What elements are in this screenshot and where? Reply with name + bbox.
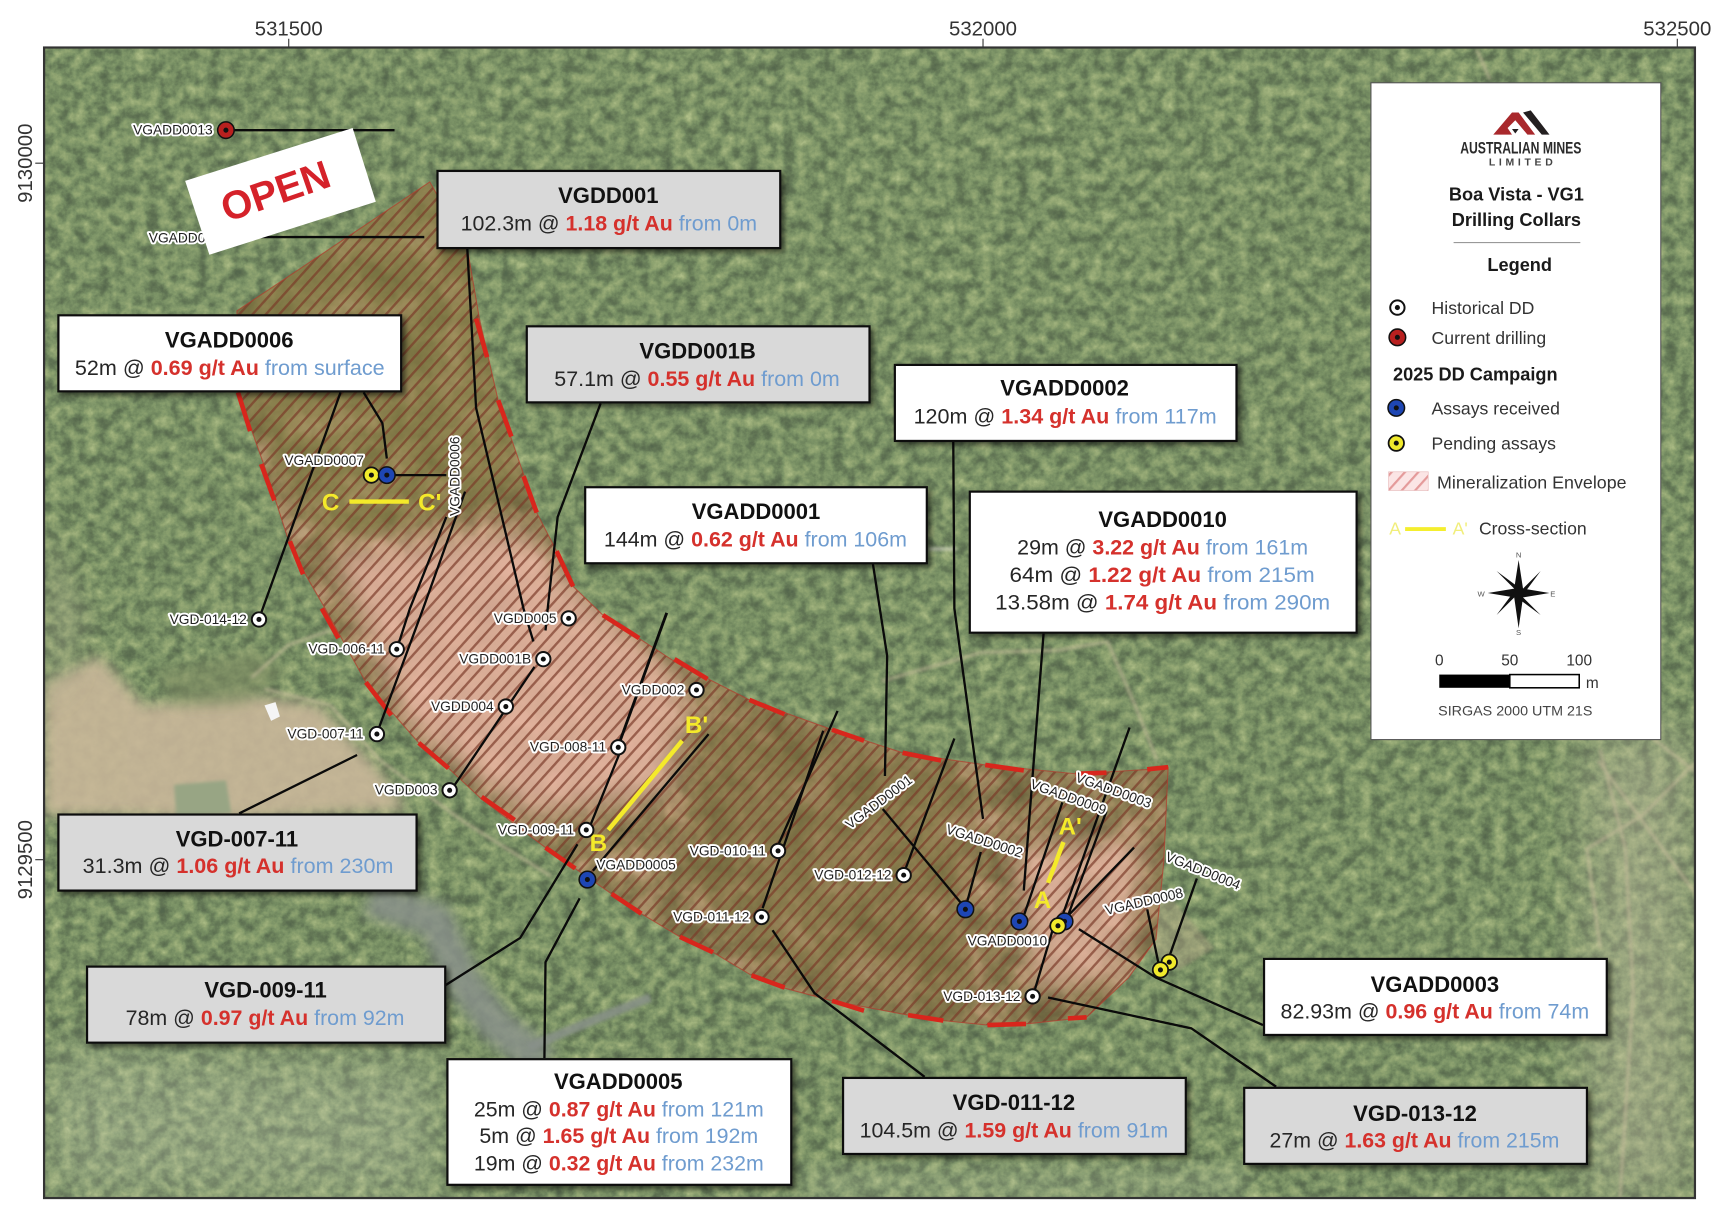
icon: compass rose: W — [1478, 589, 1486, 598]
collar labels: VGD-007-11 — [287, 726, 364, 741]
collar labels: VGADD0013 — [149, 231, 229, 246]
callout: VGADD0006 — [58, 315, 401, 391]
callout: VGDD001B — [527, 326, 870, 402]
scale bar: 50 — [1501, 653, 1518, 670]
callout: VGADD0010: 64m @ 1.22 g/t Au from 215m — [1009, 564, 1315, 587]
collar labels — [133, 123, 1243, 1004]
axis ticks and coordinates: 532000 — [949, 18, 1017, 40]
cross-section lines — [322, 489, 1082, 914]
mineralization envelope — [220, 165, 1190, 1047]
icon: compass rose: S — [1516, 628, 1521, 637]
legend title — [1449, 185, 1584, 275]
collar labels: VGADD0008 — [1104, 885, 1185, 918]
callout: VGD-007-11 — [58, 815, 417, 891]
callout: VGADD0006: 52m @ 0.69 g/t Au from surface — [75, 357, 385, 380]
scale bar: 100 — [1566, 653, 1592, 670]
collar labels: VGADD0006 — [448, 436, 463, 516]
scale bar: 0 — [1435, 653, 1444, 670]
legend item: assays received: Assays received — [1432, 398, 1560, 418]
collar labels: VGADD0007 — [284, 453, 364, 468]
callout: VGADD0002: 120m @ 1.34 g/t Au from 117m — [914, 405, 1217, 428]
callout: VGADD0002 — [895, 365, 1236, 441]
legend item: cross-section: A — [1389, 519, 1401, 539]
collar labels: VGD-008-11 — [530, 740, 606, 755]
collar labels: VGD-009-11 — [498, 822, 574, 837]
collar labels: VGD-014-12 — [170, 612, 247, 627]
collar labels: VGDD005 — [494, 611, 557, 626]
callout: VGD-013-12: VGD-013-12 — [1353, 1101, 1477, 1126]
collar labels: VGDD001B — [459, 652, 531, 667]
callout: VGDD001B: 57.1m @ 0.55 g/t Au from 0m — [554, 368, 840, 391]
panel: legend — [1371, 83, 1661, 740]
collar labels: VGADD0004 — [1163, 849, 1243, 893]
cross-section lines: C — [322, 489, 339, 516]
callout: VGADD0001 — [585, 487, 927, 563]
callout: VGD-011-12: 104.5m @ 1.59 g/t Au from 91m — [860, 1119, 1168, 1142]
collar labels: VGADD0003 — [1074, 770, 1154, 811]
callout: VGD-009-11: 78m @ 0.97 g/t Au from 92m — [126, 1007, 404, 1030]
logo — [1460, 110, 1581, 168]
callout: VGD-009-11 — [87, 967, 445, 1043]
callout: VGADD0002: VGADD0002 — [1000, 376, 1129, 401]
callout: VGD-013-12: 27m @ 1.63 g/t Au from 215m — [1270, 1129, 1559, 1152]
logo: AUSTRALIAN MINES — [1460, 138, 1581, 157]
scale bar — [1435, 653, 1599, 692]
callout: VGADD0003: VGADD0003 — [1371, 972, 1499, 997]
legend title: Boa Vista - VG1 — [1449, 185, 1584, 205]
axis ticks and coordinates — [15, 18, 1711, 899]
OPEN sticker — [185, 128, 376, 255]
collar labels: VGD-006-11 — [308, 642, 385, 657]
icon: compass rose — [1478, 551, 1555, 637]
collar labels: VGADD0009 — [1028, 776, 1108, 818]
cross-section lines: A' — [1058, 813, 1082, 840]
callout: VGADD0010: 13.58m @ 1.74 g/t Au from 290m — [995, 592, 1330, 615]
callout: VGADD0005: 25m @ 0.87 g/t Au from 121m — [474, 1098, 764, 1121]
scale bar: m — [1586, 675, 1599, 692]
collar labels: VGD-010-11 — [690, 843, 766, 858]
drill traces and leader lines — [231, 130, 1276, 1087]
axis ticks and coordinates: 9130000 — [15, 124, 37, 203]
callout: VGDD001: 102.3m @ 1.18 g/t Au from 0m — [461, 212, 757, 235]
collar labels: VGADD0013 — [133, 123, 213, 138]
callout: VGADD0003 — [1264, 959, 1607, 1035]
callout: VGADD0001: 144m @ 0.62 g/t Au from 106m — [604, 529, 907, 552]
cross-section lines: B — [590, 830, 607, 857]
legend heading: campaign: 2025 DD Campaign — [1393, 364, 1558, 384]
callout: VGADD0005: 19m @ 0.32 g/t Au from 232m — [474, 1152, 764, 1175]
callout: VGD-011-12 — [843, 1078, 1186, 1154]
icon: compass rose: E — [1550, 589, 1555, 598]
callout: VGADD0006: VGADD0006 — [165, 327, 294, 352]
legend item: cross-section: Cross-section — [1479, 519, 1587, 539]
collar labels: VGD-013-12 — [943, 989, 1020, 1004]
callout: VGD-007-11: 31.3m @ 1.06 g/t Au from 230m — [83, 855, 393, 878]
legend item: cross-section — [1389, 519, 1587, 539]
legend title: Drilling Collars — [1452, 210, 1581, 230]
coordinate system note: SIRGAS 2000 UTM 21S — [1438, 703, 1592, 718]
collar labels: VGDD002 — [622, 682, 684, 697]
axis ticks and coordinates: 531500 — [255, 18, 323, 40]
collar markers — [218, 122, 1177, 1004]
axis ticks and coordinates: 532500 — [1643, 18, 1711, 40]
collar labels: VGADD0010 — [968, 934, 1048, 949]
legend item: pending assays: Pending assays — [1432, 434, 1556, 454]
collar labels: VGADD0001 — [843, 772, 915, 832]
icon: compass rose: N — [1516, 551, 1521, 560]
cross-section lines: C' — [418, 489, 441, 516]
callout: VGADD0001: VGADD0001 — [692, 499, 820, 524]
collar labels: VGDD004 — [431, 699, 494, 714]
callout: VGD-007-11: VGD-007-11 — [176, 826, 298, 851]
callout: VGADD0010 — [970, 492, 1357, 633]
legend item: current drilling: Current drilling — [1432, 328, 1546, 348]
collar labels: VGD-011-12 — [673, 909, 749, 924]
collar labels: VGADD0005 — [596, 858, 676, 873]
axis ticks and coordinates: 9129500 — [15, 820, 37, 899]
legend item: envelope: Mineralization Envelope — [1437, 472, 1627, 492]
callout: VGD-011-12: VGD-011-12 — [953, 1090, 1075, 1115]
legend item: cross-section: A' — [1453, 519, 1468, 539]
callout: VGDD001 — [438, 171, 780, 248]
callout: VGADD0005: 5m @ 1.65 g/t Au from 192m — [479, 1125, 758, 1148]
envelope outline — [237, 182, 1168, 1025]
collar labels: VGD-012-12 — [814, 868, 892, 883]
cross-section lines: A — [1034, 887, 1051, 914]
collar labels: VGADD0002 — [944, 822, 1025, 861]
red dashed envelope boundary — [238, 319, 1168, 1025]
callout: VGD-009-11: VGD-009-11 — [204, 977, 327, 1002]
callout: VGD-013-12 — [1244, 1088, 1587, 1164]
OPEN sticker: OPEN — [215, 153, 336, 231]
cross-section lines: B' — [685, 712, 708, 739]
callout: VGADD0005: VGADD0005 — [554, 1069, 683, 1094]
callout: VGADD0003: 82.93m @ 0.96 g/t Au from 74m — [1281, 1000, 1589, 1023]
legend item: historical: Historical DD — [1432, 298, 1534, 318]
collar labels: VGDD003 — [375, 783, 438, 798]
logo: LIMITED — [1489, 157, 1553, 168]
callout: VGDD001: VGDD001 — [558, 183, 659, 208]
callout: VGDD001B: VGDD001B — [639, 338, 756, 363]
callout: VGADD0010: 29m @ 3.22 g/t Au from 161m — [1017, 536, 1308, 559]
legend title: Legend — [1487, 255, 1552, 275]
callout: VGADD0005 — [447, 1059, 791, 1185]
callout: VGADD0010: VGADD0010 — [1098, 507, 1227, 532]
